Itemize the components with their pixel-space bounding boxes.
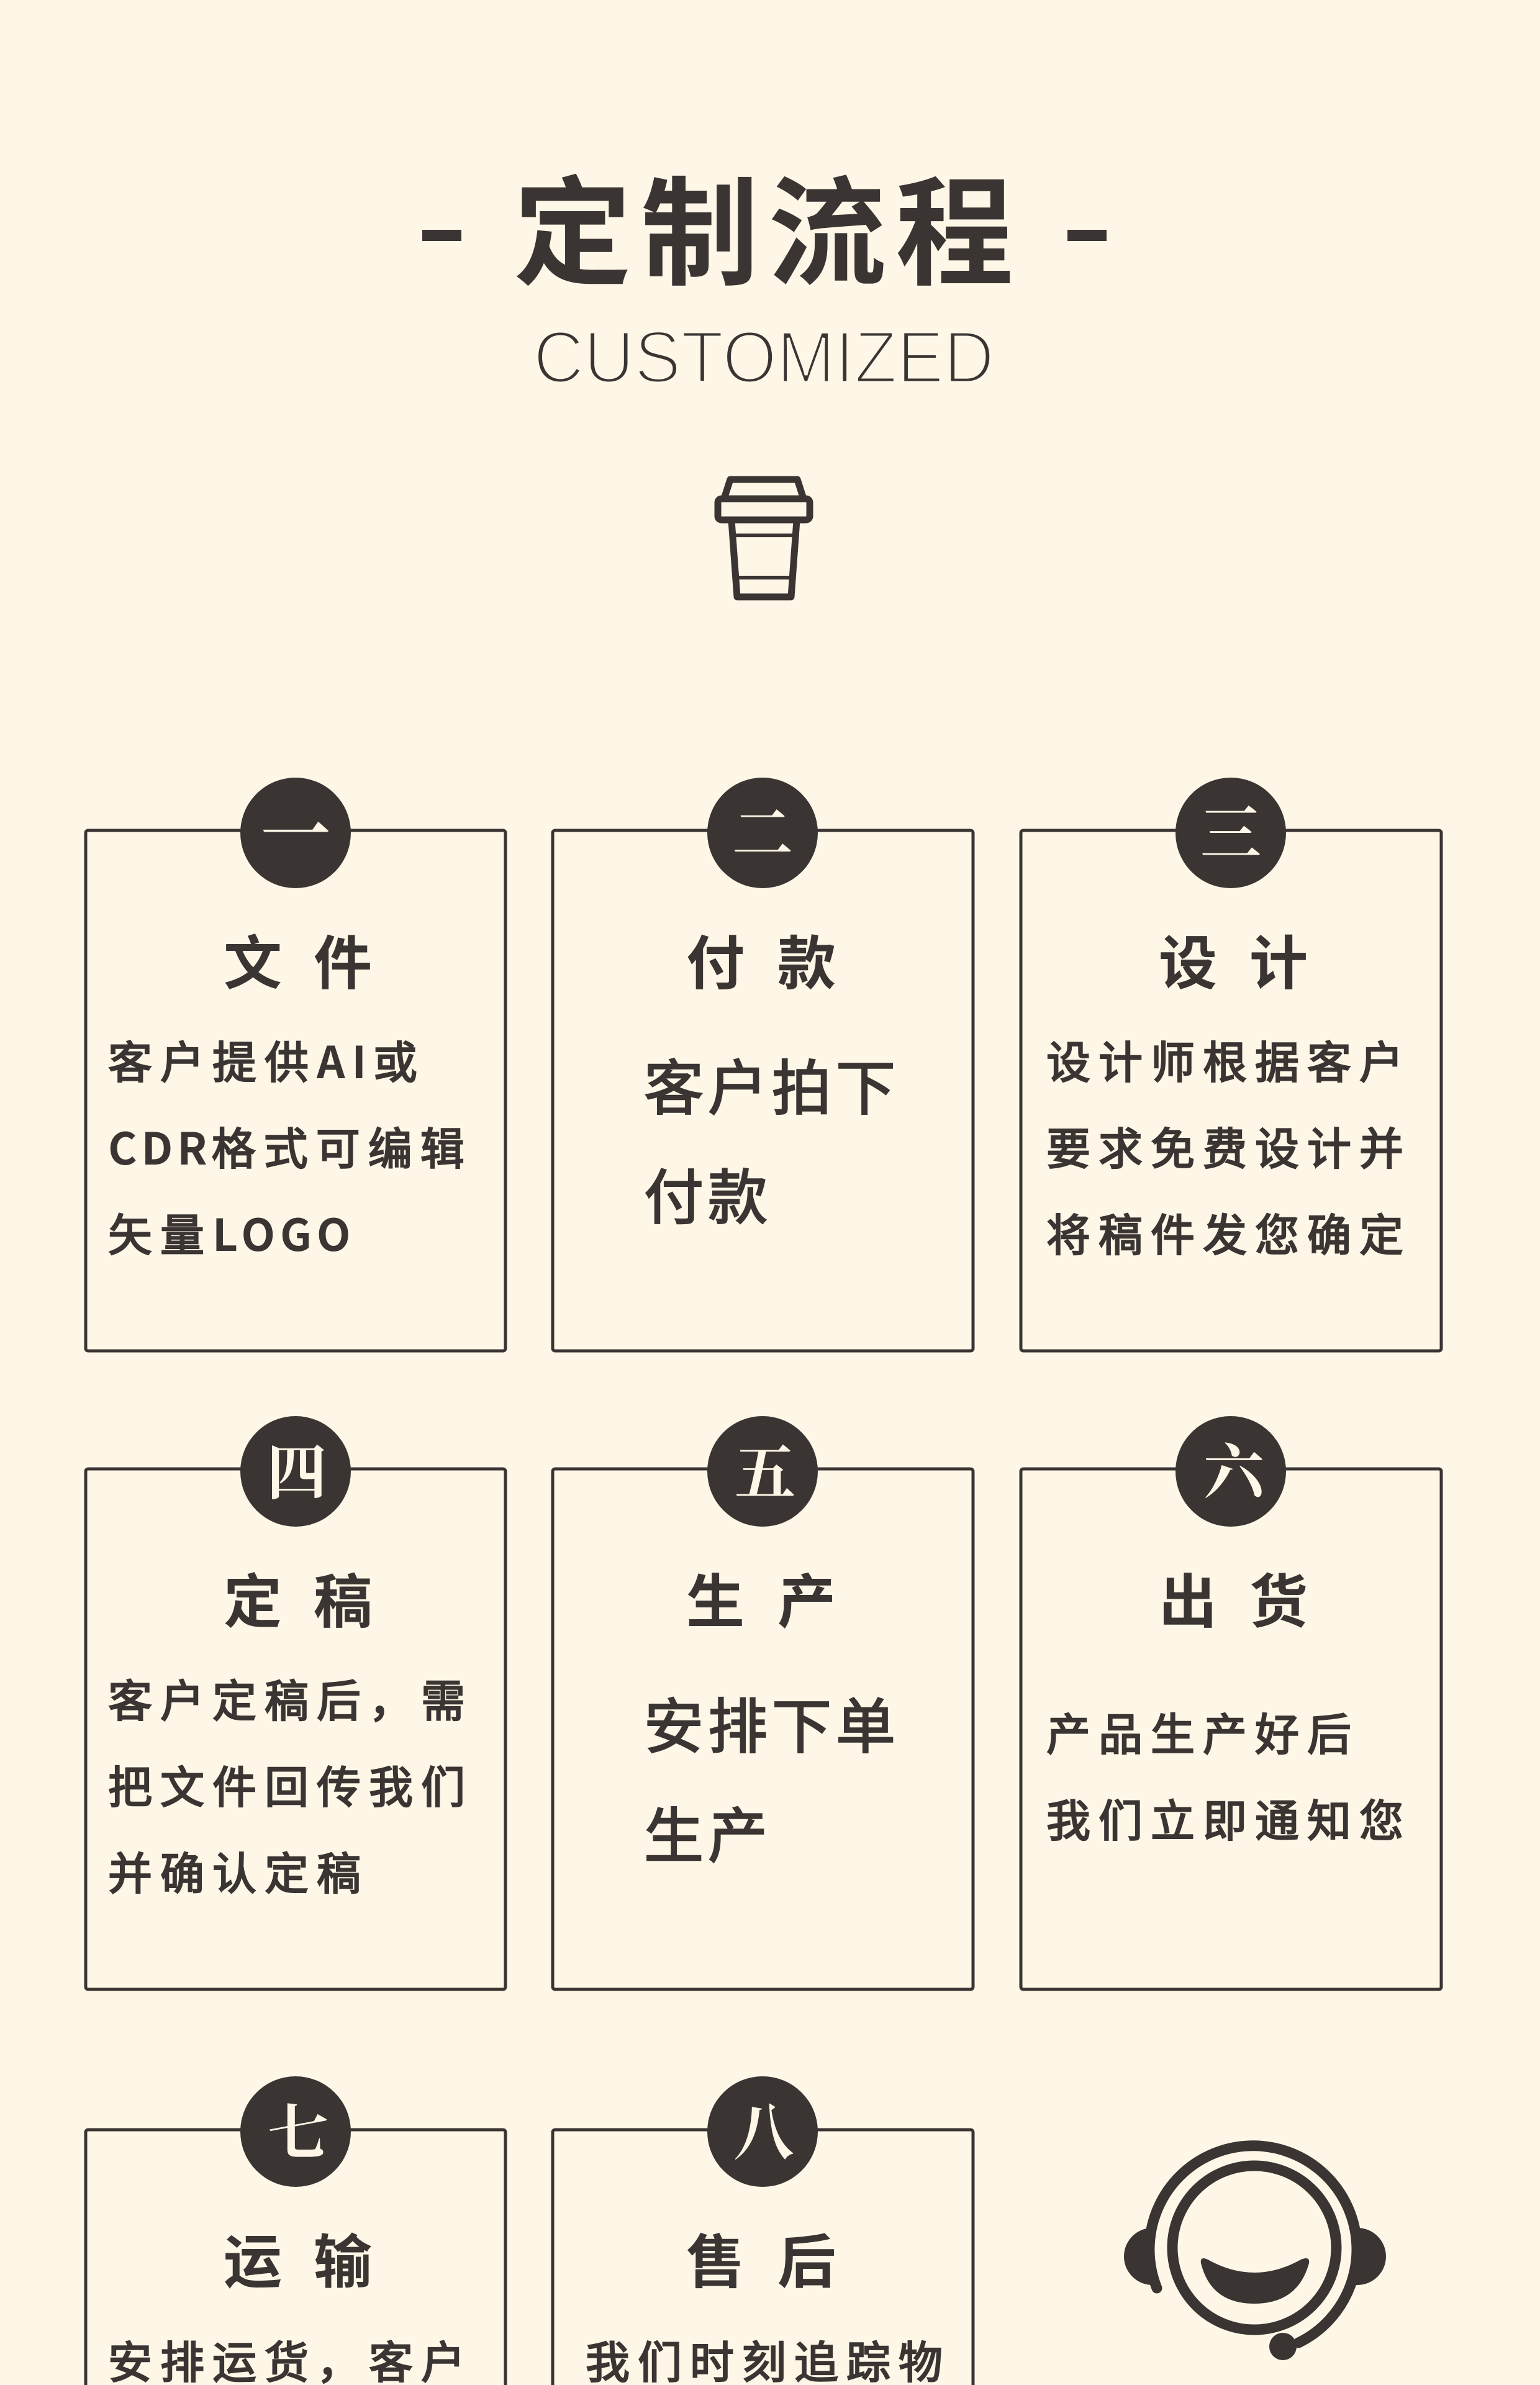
- panel: step 7: 运输: [224, 2215, 372, 2300]
- step 3 description: 将稿件发您确定: [1046, 1201, 1411, 1264]
- step 4 description: [108, 1666, 473, 1902]
- panel: step 5: 五: [735, 1424, 795, 1512]
- panel: step 4: 定稿: [224, 1555, 372, 1640]
- panel: step 2: [553, 778, 973, 1351]
- step 4 description: 客户定稿后，需: [108, 1666, 473, 1730]
- step 1 description: [108, 1028, 473, 1264]
- icon: takeaway cup: [718, 479, 810, 597]
- panel: step 6: 六: [1203, 1424, 1269, 1512]
- step 5 description: 安排下单: [644, 1679, 900, 1765]
- panel: step 8: [553, 2076, 973, 2385]
- panel: step 7: [86, 2076, 505, 2385]
- step 2 description: 付款: [644, 1150, 772, 1236]
- step 3 description: [1046, 1028, 1411, 1264]
- panel: step 2: 付款: [686, 917, 836, 1001]
- panel: step 6: 出货: [1159, 1555, 1308, 1640]
- step 6 description: [1046, 1700, 1411, 1850]
- panel: step 5: 生产: [686, 1555, 836, 1640]
- panel: step 3: 设计: [1159, 917, 1308, 1001]
- icon: customer service headset: [1124, 2146, 1386, 2360]
- subtitle: CUSTOMIZED: CUSTOMIZED: [533, 316, 994, 399]
- step 1 description: CDR格式可编辑: [108, 1114, 473, 1178]
- step 6 description: 产品生产好后: [1046, 1700, 1359, 1763]
- step 6 description: 我们立即通知您: [1046, 1786, 1411, 1850]
- panel: step 3: [1021, 778, 1441, 1351]
- step 2 description: 客户拍下: [644, 1040, 900, 1127]
- step 3 description: 设计师根据客户: [1046, 1028, 1411, 1091]
- panel: step 7: 七: [268, 2084, 328, 2172]
- panel: step 1: 一: [261, 779, 330, 879]
- step 4 description: 并确认定稿: [108, 1839, 369, 1902]
- step 5 description: 生产: [644, 1788, 772, 1874]
- panel: step 1: [86, 778, 505, 1351]
- step 1 description: 客户提供AI或: [108, 1028, 425, 1091]
- step 4 description: 把文件回传我们: [108, 1753, 473, 1816]
- panel: step 8: 售后: [686, 2215, 836, 2300]
- panel: step 6: [1021, 1416, 1441, 1989]
- panel: step 3: 三: [1200, 786, 1261, 873]
- panel: step 8: 八: [733, 2084, 794, 2172]
- title: 定制流程: [514, 139, 1023, 309]
- panel: step 4: [86, 1416, 505, 1989]
- panel: step 2: 二: [732, 786, 793, 873]
- panel: step 4: 四: [266, 1424, 327, 1512]
- step 3 description: 要求免费设计并: [1046, 1114, 1411, 1178]
- step 1 description: 矢量LOGO: [108, 1201, 356, 1264]
- step 5 description: [644, 1679, 900, 1874]
- step 2 description: [644, 1040, 900, 1236]
- panel: step 1: 文件: [224, 917, 372, 1001]
- panel: step 5: [553, 1416, 973, 1989]
